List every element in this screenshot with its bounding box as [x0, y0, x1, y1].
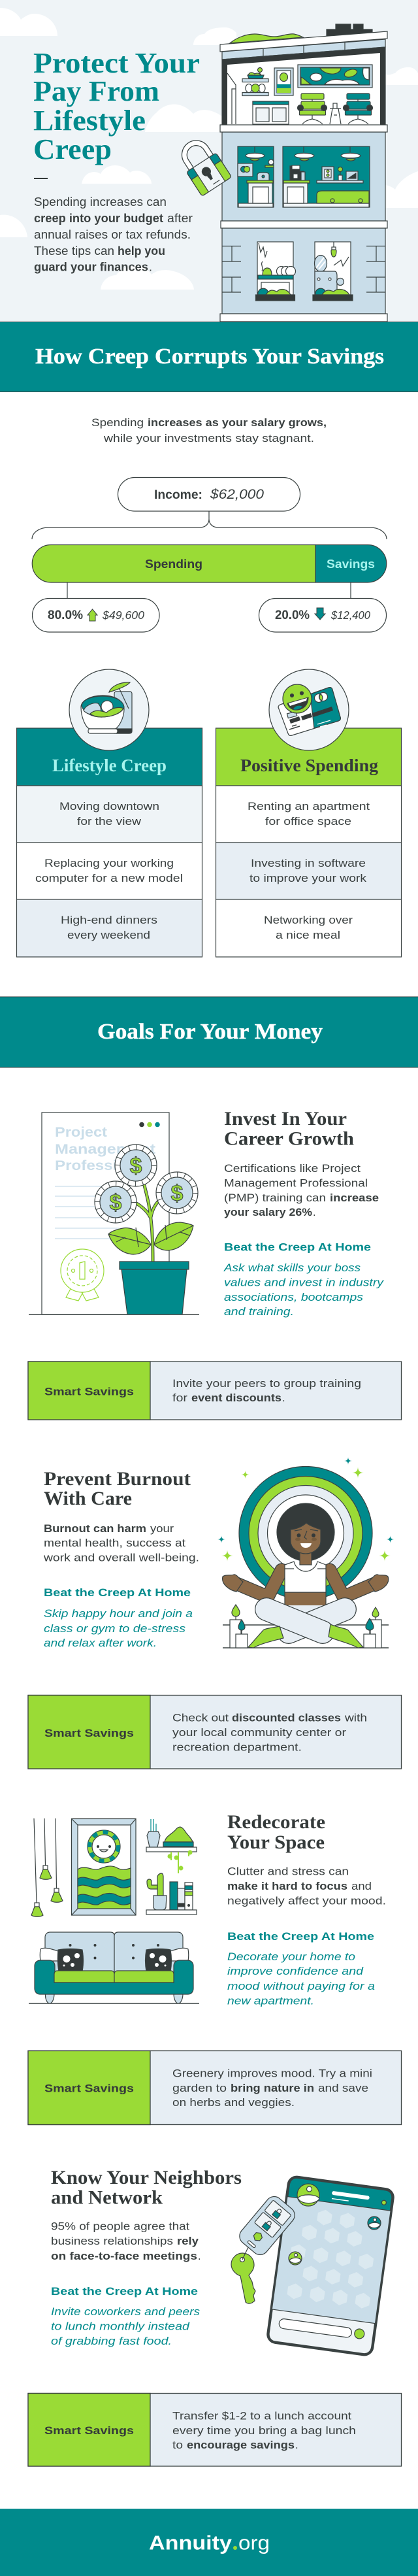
panel: how creep corrupts your savings: [0, 322, 418, 632]
intro text: creep into your budget: [34, 212, 163, 225]
tip heading: Beat the Creep At Home: [51, 2285, 198, 2298]
savings pill: [259, 599, 387, 632]
face: [291, 1523, 321, 1554]
rings: [239, 1467, 372, 1600]
intro text: [34, 195, 193, 273]
tip text: new apartment.: [227, 1995, 314, 2007]
body text: [51, 2221, 201, 2262]
body text: rely: [177, 2235, 199, 2247]
callout: smart savings 3: Greenery improves mood. Try a mini: [172, 2068, 372, 2080]
arms: [234, 1570, 378, 1597]
row text: every weekend: [67, 929, 150, 941]
intro text: annual raises or tax refunds.: [34, 228, 191, 241]
certificate: Management: [55, 1142, 155, 1157]
callout: smart savings 4: [28, 2394, 401, 2466]
callout: smart savings 2: Check out: [172, 1713, 229, 1724]
tip text: Decorate your home to: [227, 1951, 355, 1963]
body text: increase: [330, 1192, 379, 1204]
callout: smart savings 3: and save: [318, 2083, 368, 2094]
tip text: [223, 1262, 385, 1318]
coins: [95, 1145, 198, 1223]
top floor: small picture: [274, 68, 293, 95]
icon: bowl and drink: [69, 669, 149, 750]
row text: to improve your work: [249, 872, 367, 884]
tip text: to lunch monthly instead: [51, 2320, 190, 2332]
illustration: meditating woman: [217, 1457, 394, 1648]
callout: smart savings 4: every time you bring a bag lunch: [172, 2425, 356, 2437]
heading: Know Your Neighbors: [51, 2167, 242, 2188]
tip text: associations, bootcamps: [224, 1292, 363, 1303]
body text: on face-to-face meetings: [51, 2250, 197, 2262]
title: Pay From: [33, 75, 159, 107]
candles: [230, 1605, 381, 1648]
stacked bar: spending vs savings: Spending: [145, 558, 202, 571]
heading: [44, 1468, 191, 1509]
callout: smart savings 4: Transfer $1-2 to a lunch account: [172, 2411, 351, 2422]
footer: logo band: org: [238, 2531, 270, 2554]
body text: work and overall well-being.: [43, 1552, 199, 1564]
intro text: help you: [118, 244, 165, 258]
tip text: Ask what skills your boss: [223, 1262, 361, 1274]
body text: your salary 26%: [224, 1207, 312, 1218]
heading: With Care: [44, 1488, 132, 1509]
body text: [224, 1163, 379, 1218]
heading: Career Growth: [224, 1128, 354, 1149]
top floor: green chair: [298, 93, 327, 124]
framed picture: [72, 1818, 136, 1915]
callout: smart savings 2: [28, 1696, 401, 1769]
callout: smart savings 1: Invite your peers to group training: [172, 1378, 361, 1390]
income pill: Income:: [154, 488, 202, 502]
intro text: after: [167, 212, 193, 225]
body text: [227, 1865, 386, 1907]
spending pill: $49,600: [102, 609, 144, 622]
bottom floor: right window: [313, 242, 353, 301]
callout: smart savings 1: [28, 1362, 401, 1420]
bracket connector: [32, 511, 387, 598]
panel: prevent burnout with care: [43, 1457, 394, 1649]
callout: smart savings 2: Smart Savings: [44, 1727, 134, 1739]
tip text: and relax after work.: [44, 1637, 157, 1649]
row text: for office space: [265, 815, 351, 828]
lower shelf: [146, 1873, 197, 1915]
intro text: while your investments stay stagnant.: [103, 432, 314, 444]
body text: 95% of people agree that: [51, 2221, 189, 2233]
top floor: teal chair: [344, 93, 372, 124]
row text: Renting an apartment: [248, 800, 370, 812]
heading: Invest In Your: [224, 1108, 347, 1129]
body text: your: [150, 1523, 174, 1535]
callout: smart savings 3: bring nature in: [231, 2083, 314, 2094]
row text: High-end dinners: [61, 914, 157, 926]
spending pill: [33, 599, 159, 632]
body text: negatively affect your mood.: [227, 1896, 386, 1907]
callout: smart savings 3: [28, 2051, 401, 2124]
callout: smart savings 2: recreation department.: [172, 1741, 302, 1753]
row text: Networking over: [264, 914, 353, 926]
income pill: [118, 477, 300, 511]
tip text: Skip happy hour and join a: [44, 1608, 193, 1620]
heading: Prevent Burnout: [44, 1468, 191, 1490]
body text: Clutter and stress can: [227, 1865, 349, 1877]
callout: smart savings 4: encourage savings: [187, 2439, 295, 2451]
certificate: Professional: [55, 1158, 150, 1173]
callout: smart savings 1: for: [172, 1392, 188, 1404]
panel: positive spending column: [216, 669, 401, 957]
top: [285, 1562, 326, 1592]
callout: smart savings 1: .: [282, 1392, 285, 1404]
row text: computer for a new model: [35, 872, 183, 884]
tip text: [227, 1951, 375, 2007]
body text: and: [351, 1881, 372, 1892]
chat avatars: [289, 2184, 381, 2265]
illustration: building: [175, 24, 387, 322]
spending pill: 80.0%: [48, 609, 83, 622]
body text: make it hard to focus: [227, 1881, 347, 1892]
upper shelf: [146, 1819, 197, 1873]
bricks: [222, 246, 385, 292]
heading: Redecorate: [227, 1811, 325, 1833]
tip text: Invite coworkers and peers: [51, 2306, 200, 2318]
callout: smart savings 3: Smart Savings: [44, 2083, 134, 2094]
certificate: [42, 1112, 169, 1314]
key: [231, 2246, 255, 2303]
panel: goals heading band: Goals For Your Money: [97, 1020, 323, 1044]
row text: [35, 800, 183, 941]
callout: smart savings 4: .: [295, 2439, 298, 2451]
body text: .: [313, 1207, 316, 1218]
title: Creep: [33, 133, 112, 165]
callout: smart savings 3: garden to: [172, 2083, 227, 2094]
intro text: Spending increases can: [34, 195, 167, 209]
callout: smart savings 2: discounted classes: [232, 1713, 341, 1724]
callout: smart savings 1: event discounts: [191, 1392, 281, 1404]
savings pill: $12,400: [330, 609, 370, 622]
icon: padlock: [175, 135, 232, 196]
tip heading: Beat the Creep At Home: [227, 1930, 374, 1943]
callout: smart savings 4: to: [172, 2439, 183, 2451]
callout: smart savings 2: with: [344, 1713, 367, 1724]
tip text: mood without paying for a: [227, 1981, 375, 1992]
stacked bar: spending vs savings: Savings: [327, 558, 375, 571]
intro text: guard your finances: [34, 260, 148, 273]
feet: [248, 1624, 363, 1648]
plant stems: [131, 1173, 165, 1262]
panel: invest in your career growth: [29, 1108, 385, 1318]
coins: $: [130, 1154, 142, 1179]
body text: .: [198, 2250, 201, 2262]
intro text: [91, 416, 327, 444]
top floor: side table: [330, 103, 341, 124]
tip text: improve confidence and: [227, 1965, 364, 1977]
intro text: Spending: [91, 416, 144, 429]
panel: hero: [0, 0, 418, 322]
top floor: shelves: [242, 68, 268, 95]
title: Protect Your: [33, 47, 200, 79]
heading: [51, 2167, 242, 2208]
row text: for the view: [77, 815, 142, 828]
heading: [227, 1811, 325, 1853]
pendant lamps: [31, 1818, 63, 1916]
body text: Burnout can harm: [44, 1523, 146, 1535]
row text: Investing in software: [251, 857, 366, 869]
footer: logo band: Annuity: [149, 2531, 233, 2554]
row text: Replacing your working: [44, 857, 174, 869]
panel: know your neighbors and network: [51, 2167, 394, 2356]
savings pill: 20.0%: [275, 609, 310, 622]
intro text: increases as your salary grows,: [148, 416, 327, 429]
panel: lifestyle creep column: [17, 669, 202, 957]
column heading: Lifestyle Creep: [52, 756, 167, 775]
callout: smart savings 1: Smart Savings: [44, 1386, 134, 1397]
tip heading: Beat the Creep At Home: [224, 1241, 371, 1254]
tip text: class or gym to de-stress: [44, 1623, 185, 1635]
intro text: These tips can: [34, 244, 114, 258]
heading: Your Space: [227, 1832, 325, 1853]
body text: [43, 1523, 199, 1564]
footer: logo band: [0, 2509, 418, 2576]
heading band: [0, 322, 418, 392]
coins: $: [171, 1181, 184, 1206]
flower pot: [120, 1262, 189, 1314]
tip heading: Beat the Creep At Home: [44, 1586, 191, 1599]
ground and rail: [223, 1625, 389, 1648]
callout: smart savings 3: on herbs and veggies.: [172, 2097, 295, 2109]
heading: [224, 1108, 354, 1149]
body text: mental health, success at: [44, 1537, 185, 1549]
income pill: $62,000: [210, 487, 264, 502]
torso: [285, 1592, 326, 1609]
certificate: Project: [55, 1125, 107, 1140]
row text: [248, 800, 370, 941]
middle floor: right window: [283, 146, 370, 207]
icon: credit card and smiley: [269, 669, 349, 750]
key fob: [236, 2193, 298, 2258]
title: [33, 47, 200, 165]
title: Lifestyle: [33, 105, 146, 137]
bottom floor: left window: [256, 242, 295, 301]
stacked bar: spending vs savings: [32, 545, 387, 582]
couch: [29, 1932, 199, 2003]
hands: [223, 1575, 389, 1592]
sparkles: [217, 1457, 394, 1562]
legs: [266, 1605, 345, 1632]
clouds: [0, 8, 418, 290]
illustration: phone and car keys: [231, 2176, 394, 2356]
body text: Certifications like Project: [224, 1163, 361, 1175]
row text: a nice meal: [276, 929, 340, 941]
heading band: How Creep Corrupts Your Savings: [35, 344, 384, 369]
body text: (PMP) training can: [224, 1192, 326, 1204]
top floor: door: [227, 73, 236, 124]
column heading: Positive Spending: [240, 756, 379, 775]
illustration: living room: [29, 1818, 199, 2003]
panel: redecorate your space: [29, 1811, 386, 2007]
middle floor: left window: [238, 146, 274, 207]
body text: business relationships: [51, 2235, 173, 2247]
row text: Moving downtown: [59, 800, 159, 812]
tip text: of grabbing fast food.: [51, 2335, 172, 2347]
neck: [300, 1550, 312, 1565]
top floor: cabinet: [253, 101, 289, 124]
tip text: [51, 2306, 200, 2347]
body text: Management Professional: [224, 1178, 368, 1190]
coins: $: [110, 1190, 122, 1215]
heading: and Network: [51, 2187, 163, 2208]
callout: smart savings 4: Smart Savings: [44, 2424, 134, 2437]
panel: goals heading band: [0, 997, 418, 1067]
tip text: and training.: [224, 1306, 294, 1318]
hair: [277, 1503, 334, 1561]
award badge: [61, 1249, 104, 1301]
phone: [266, 2176, 394, 2356]
top floor: large picture: [298, 65, 372, 88]
leaves: [108, 1222, 193, 1254]
illustration: certificate and money plant: [29, 1112, 199, 1314]
intro text: .: [149, 260, 152, 273]
tip text: [44, 1608, 193, 1649]
callout: smart savings 2: your local community center or: [172, 1727, 347, 1739]
tip text: values and invest in industry: [224, 1277, 385, 1289]
